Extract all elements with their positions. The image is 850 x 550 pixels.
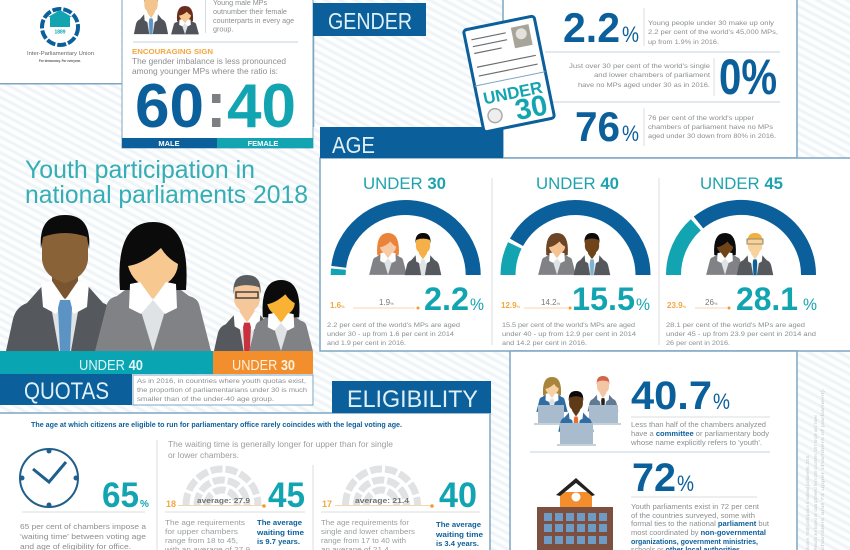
- panel: under 30 statistics: up from 1.9% in 2016.: [648, 39, 719, 46]
- ratio 60:40: 60: [135, 72, 204, 141]
- age group: under 40: and 14.2 per cent in 2016.: [502, 340, 587, 347]
- title: Youth participation in: [25, 156, 255, 184]
- panel: committees and youth parliaments: have a committee or parliamentary body: [631, 431, 763, 438]
- icon: people at laptops: [534, 376, 621, 446]
- bar: under 30: UNDER 30: [232, 357, 295, 374]
- panel: logo: 1889: [54, 30, 66, 36]
- text: young male MPs: group.: [213, 24, 233, 34]
- bar: under 30: [213, 351, 313, 374]
- panel: eligibility: The age requirements: [165, 518, 245, 527]
- age group: under 30: %: [470, 295, 484, 314]
- stat 76%: 76: [575, 103, 620, 150]
- text: young male MPs: counterparts in every age: [213, 16, 294, 25]
- bar: under 40: [0, 351, 213, 374]
- icon: MPs under 45: [706, 233, 773, 275]
- panel: under 30 statistics: [503, 0, 797, 158]
- age group: under 45: 26%: [705, 298, 718, 307]
- text box: quotas: smaller than of the under-40 age group.: [137, 396, 274, 403]
- text: gender imbalance: The gender imbalance is less pronounced: [132, 56, 286, 66]
- panel: committees and youth parliaments: formal ties to the national parliament but: [631, 521, 768, 528]
- male female bars: [122, 138, 313, 148]
- ratio 60:40: 40: [227, 72, 296, 141]
- text box: quotas: [133, 375, 313, 405]
- text: young male MPs: outnumber their female: [213, 7, 287, 16]
- icon: clock: [20, 448, 78, 508]
- panel: under 30 statistics: have no MPs aged under 30 as in 2016.: [578, 82, 710, 89]
- text: encouraging sign: ENCOURAGING SIGN: [132, 47, 213, 56]
- icon: MPs under 40: [538, 233, 610, 275]
- panel: committees and youth parliaments: organizations, government ministries,: [631, 539, 758, 546]
- heading: quotas: [0, 374, 132, 405]
- bar: under 40: UNDER 40: [79, 357, 143, 374]
- gauge: under 30: [338, 208, 473, 275]
- age group: under 45: 26 per cent in 2016.: [666, 340, 730, 347]
- title: national parliaments 2018: [25, 181, 308, 209]
- heading: eligibility: ELIGIBILITY: [347, 386, 478, 413]
- source note: [805, 388, 825, 550]
- text box: quotas: the proportion of parliamentarians under 30 is much: [137, 387, 307, 394]
- age group: under 45: %: [803, 295, 817, 314]
- panel: eligibility: single and lower chambers: [321, 527, 415, 536]
- panel: eligibility: range from 18 to 45,: [165, 536, 238, 545]
- text: intro: The age at which citizens are eligible to run for parliamentary office rarely coincides with the legal voting age.: [31, 422, 402, 429]
- gauge: under 45: [673, 207, 808, 275]
- age group: under 30: under 30 - up from 1.6 per cent in 2014: [327, 331, 454, 338]
- age group: under 45: under 45 - up from 23.9 per cent in 2014 and: [666, 331, 816, 338]
- panel: eligibility: for upper chambers: [165, 527, 238, 536]
- panel: committees and youth parliaments: Less than half of the chambers analyzed: [631, 422, 766, 429]
- panel: committees and youth parliaments: most coordinated by non-governmental: [631, 530, 762, 537]
- chart: upper chambers: 18: [166, 499, 176, 509]
- heading: age: [320, 127, 503, 158]
- chart: lower chambers: 17: [322, 499, 332, 509]
- age group: under 40: [501, 174, 650, 347]
- source note: Results are based on data gathered from 150 countries (167 single and lower: [813, 415, 818, 550]
- stat 40.7%: 40.7: [631, 374, 712, 418]
- stat 2.2%: %: [622, 22, 639, 47]
- male female bars: FEMALE: [248, 139, 278, 148]
- age group: under 45: [666, 174, 817, 347]
- stat 72%: %: [677, 471, 694, 496]
- illustration: young parliamentarians: [6, 215, 313, 351]
- panel: committees and youth parliaments: [510, 351, 797, 550]
- panel: under 30 statistics: 2.2 per cent of the world's 45,000 MPs,: [648, 29, 778, 36]
- icon: school building: [537, 478, 613, 550]
- age group: under 30: 1.6%: [330, 301, 345, 310]
- age group: under 30: UNDER 30: [363, 174, 446, 193]
- chart: upper chambers: [166, 469, 305, 515]
- age group: under 45: UNDER 45: [700, 174, 783, 193]
- callout: lower chamber wait: The average: [436, 520, 481, 529]
- source note: Source: Youth participation in national parliaments: 2018.: [805, 455, 810, 550]
- age group: under 40: 15.5 per cent of the world's MPs are aged: [502, 322, 635, 329]
- callout: upper chamber wait: waiting time: [256, 528, 304, 537]
- age group: under 45: 23.9%: [667, 301, 687, 310]
- chart: upper chambers: average: 27.9: [197, 496, 250, 505]
- age group: under 40: 15.5: [572, 281, 635, 317]
- stat 65%: %: [140, 499, 149, 510]
- panel: eligibility: The age requirements for: [321, 518, 410, 527]
- panel: committees and youth parliaments: whose name explicitly refers to 'youth'.: [630, 440, 762, 447]
- heading: gender: GENDER: [328, 8, 412, 34]
- callout: upper chamber wait: The average: [257, 518, 302, 527]
- panel: logo: [0, 0, 122, 84]
- text box: quotas: As in 2016, in countries where youth quotas exist,: [137, 378, 306, 385]
- panel: under 30 statistics: and lower chambers of parliament: [594, 72, 710, 79]
- age group: under 45: 28.1 per cent of the world's MPs are aged: [666, 322, 805, 329]
- chart: upper chambers: 45: [268, 476, 305, 515]
- age group: under 40: UNDER 40: [536, 174, 619, 193]
- panel: committees and youth parliaments: Youth parliaments exist in 72 per cent: [631, 504, 759, 511]
- stat 65%: 65: [102, 476, 139, 515]
- age group: under 40: 12.9%: [501, 301, 521, 310]
- icon: under 30 candidate card: [463, 16, 555, 134]
- icon: under 30 candidate card: 30: [512, 89, 550, 127]
- panel: under 30 statistics: aged under 30 down from 80% in 2016.: [648, 133, 776, 140]
- chart: lower chambers: average: 21.4: [355, 496, 410, 505]
- heading: quotas: QUOTAS: [24, 378, 109, 405]
- panel: eligibility: 'waiting time' between voting age: [20, 532, 146, 541]
- age group: under 45: 28.1: [736, 281, 798, 317]
- source note: chambers and 74 upper chambers of parliament).: [820, 388, 825, 550]
- age group: under 40: %: [636, 295, 650, 314]
- age group: under 30: and 1.9 per cent in 2016.: [327, 340, 406, 347]
- age group: under 40: 14.2%: [541, 298, 561, 307]
- stat 40.7%: %: [713, 389, 730, 414]
- chart: lower chambers: [322, 469, 477, 515]
- text: waiting time: or lower chambers.: [168, 451, 239, 460]
- age group: under 30: 2.2: [424, 281, 469, 317]
- panel: under 30 statistics: chambers of parliament have no MPs: [648, 124, 774, 131]
- stat 2.2%: 2.2: [563, 4, 620, 51]
- icon: under 30 candidate card: UNDER: [482, 78, 544, 108]
- heading: gender: [313, 3, 426, 36]
- panel: age: [320, 158, 850, 351]
- title: [25, 156, 308, 209]
- chart: lower chambers: 40: [439, 476, 477, 515]
- stat 0%: 0%: [719, 49, 777, 105]
- stat 72%: 72: [632, 456, 676, 500]
- text: waiting time: The waiting time is generally longer for upper than for single: [168, 440, 394, 449]
- callout: lower chamber wait: waiting time: [435, 530, 483, 539]
- callout: upper chamber wait: is 9.7 years.: [257, 537, 300, 546]
- ratio 60:40: [135, 72, 296, 141]
- panel: eligibility: 65 per cent of chambers impose a: [20, 522, 147, 531]
- male female bars: MALE: [158, 139, 180, 148]
- age group: under 30: 2.2 per cent of the world's MPs are aged: [327, 322, 460, 329]
- age group: under 30: [327, 174, 484, 347]
- panel: logo: Inter-Parliamentary Union: [27, 51, 94, 57]
- panel: eligibility: range from 17 to 40 with: [321, 536, 406, 545]
- heading: age: AGE: [332, 132, 375, 158]
- text: gender imbalance: among younger MPs where the ratio is:: [132, 66, 278, 76]
- panel: committees and youth parliaments: of the countries surveyed, some with: [631, 513, 755, 520]
- panel: under 30 statistics: Young people under 30 make up only: [648, 20, 775, 27]
- panel: eligibility: [0, 413, 490, 550]
- icon: man and woman MPs: [134, 0, 199, 34]
- panel: under 30 statistics: Just over 30 per cent of the world's single: [569, 63, 710, 70]
- gauge: under 40: [508, 208, 643, 275]
- panel: under 30 statistics: 76 per cent of the world's upper: [648, 115, 755, 122]
- age group: under 40: under 40 - up from 12.9 per cent in 2014: [502, 331, 636, 338]
- stat 76%: %: [622, 121, 639, 146]
- icon: MPs under 30: [369, 233, 441, 275]
- callout: lower chamber wait: is 3.4 years.: [436, 539, 479, 548]
- panel: gender: [122, 0, 313, 148]
- age group: under 30: 1.9%: [379, 298, 394, 307]
- panel: logo: For democracy. For everyone.: [39, 59, 81, 63]
